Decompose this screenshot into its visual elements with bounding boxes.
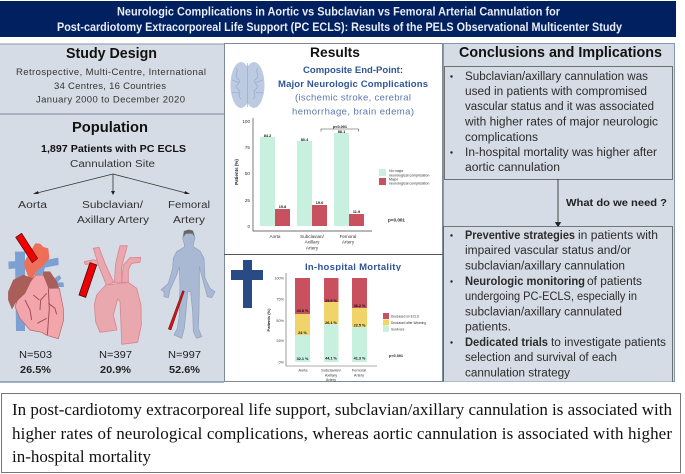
icon: cross [231, 260, 263, 308]
stacked bar chart: in-hospital mortality: Aorta [298, 368, 308, 372]
title banner: Post-cardiotomy Extracorporeal Life Support (PC ECLS): Results of the PELS Observational Multicenter Study [57, 22, 623, 34]
patient count: 1,897 Patients with PC ECLS [41, 144, 186, 155]
conclusions heading: Conclusions and Implications [459, 44, 662, 61]
needs box: of patients [587, 276, 642, 288]
stacked bar chart: in-hospital mortality: p<0.001 [389, 354, 403, 358]
bar chart: major neurologic complications: 25 [245, 198, 250, 203]
needs box: patients. [465, 322, 511, 334]
bottom summary box [2, 394, 680, 472]
conclusions box: used in patients with compromised [465, 86, 647, 98]
stacked bar chart: in-hospital mortality: 0% [278, 360, 285, 364]
bottom summary box: in-hospital mortality [12, 447, 152, 466]
bar chart: major neurologic complications: 15.8 [279, 205, 286, 209]
stacked bar chart: in-hospital mortality: Subclavian/ [321, 368, 342, 372]
site labels: Subclavian/ [82, 200, 143, 211]
site counts and percentages: 52.6% [169, 365, 200, 376]
bar chart: major neurologic complications: 0 [247, 224, 250, 229]
stacked bar chart: in-hospital mortality: Deceased after Weaning [391, 321, 426, 325]
site labels: Femoral [168, 200, 210, 211]
population heading: Population [72, 120, 148, 136]
stacked bar chart: in-hospital mortality: 36.2 % [354, 304, 366, 308]
results heading: Results [310, 45, 360, 60]
stacked bar chart: in-hospital mortality: 22.5 % [354, 324, 366, 328]
site labels: Axillary Artery [77, 215, 149, 226]
icon: aortic arch with axillary cannula [79, 246, 141, 344]
site labels: Aorta [18, 200, 48, 211]
bar chart: major neurologic complications: 88.1 [338, 130, 345, 134]
bar chart: major neurologic complications: 75 [245, 145, 250, 150]
panel: results [224, 44, 443, 382]
bar chart: major neurologic complications: Subclavian/ [300, 234, 325, 239]
panel: study design [0, 44, 224, 114]
bar chart: major neurologic complications [234, 118, 429, 250]
needs box: to investigate patients [551, 337, 666, 349]
site counts and percentages: N=503 [19, 350, 52, 361]
title banner: Neurologic Complications in Aortic vs Subclavian vs Femoral Arterial Cannulation for [117, 6, 560, 18]
bottom summary box: In post-cardiotomy extracorporeal life support, subclavian/axillary cannulation is associated with [12, 400, 672, 419]
needs box: Dedicated trials [465, 337, 548, 349]
needs box: undergoing PC-ECLS, especially in [465, 291, 637, 303]
conclusions box: vascular status and it was associated [465, 101, 654, 113]
panel: population [0, 114, 224, 382]
bar chart: major neurologic complications: neurological complication [389, 182, 429, 186]
bar chart: major neurologic complications: Femoral [340, 234, 356, 239]
stacked bar chart: in-hospital mortality [266, 271, 435, 382]
bar chart: major neurologic complications: 80.4 [301, 138, 309, 142]
site counts and percentages: N=397 [99, 350, 132, 361]
needs box: Neurologic monitoring [465, 276, 585, 288]
composite end-point heading: (ischemic stroke, cerebral [295, 92, 411, 104]
bar chart: major neurologic complications: 100 [242, 119, 250, 124]
stacked bar chart: in-hospital mortality: 50% [276, 319, 285, 323]
composite end-point heading: hemorrhage, brain edema) [292, 106, 414, 118]
needs box: subclavian/axillary cannulation [465, 260, 625, 272]
site counts and percentages: 20.9% [100, 365, 131, 376]
bar chart: major neurologic complications: neurological complication [389, 174, 429, 178]
stacked bar chart: in-hospital mortality: 41.3 % [354, 356, 366, 360]
panel: conclusions and implications [444, 44, 674, 382]
stacked bar chart: in-hospital mortality: Artery [326, 378, 336, 382]
stacked bar chart: in-hospital mortality: 24 % [298, 331, 307, 335]
title banner [0, 1, 676, 37]
bar chart: major neurologic complications: 50 [245, 171, 250, 176]
panel: study design: 34 Centres, 16 Countries [54, 81, 166, 92]
bar chart: major neurologic complications: 19.6 [316, 201, 323, 205]
site counts and percentages: 26.5% [20, 365, 51, 376]
icon: heart with aortic cannula [8, 233, 64, 339]
needs box: subclavian/axillary cannulated [465, 306, 622, 318]
stacked bar chart: in-hospital mortality: Axillary [325, 374, 337, 378]
conclusions box: In-hospital mortality was higher after [465, 147, 657, 159]
site labels [18, 200, 210, 226]
stacked bar chart: in-hospital mortality: Artery [354, 374, 364, 378]
bar chart: major neurologic complications: 11.9 [353, 210, 360, 214]
conclusions box: Subclavian/axillary cannulation was [465, 71, 648, 83]
composite end-point heading: Composite End-Point: [303, 65, 403, 76]
stacked bar chart: in-hospital mortality: Patients (%) [266, 308, 271, 331]
stacked bar chart: in-hospital mortality: 25% [276, 339, 285, 343]
stacked bar chart: in-hospital mortality: 75% [276, 298, 285, 302]
bar chart: major neurologic complications: Major [389, 178, 399, 182]
bar chart: major neurologic complications: No major [389, 169, 404, 173]
bar chart: major neurologic complications: Aorta [270, 234, 281, 239]
bottom summary box: higher rates of neurological complications, whereas aortic cannulation is associated with higher [12, 424, 672, 443]
arrow: conclusions to needs [556, 179, 560, 226]
stacked bar chart: in-hospital mortality: Deceased on ECLS [391, 314, 419, 318]
stacked bar chart: in-hospital mortality: 43.8 % [297, 309, 309, 313]
bar chart: major neurologic complications: p<0.001 [388, 218, 405, 222]
stacked bar chart: in-hospital mortality: 32.1 % [297, 357, 309, 361]
conclusions box: aortic cannulation [465, 162, 560, 174]
stacked bar chart: in-hospital mortality: 100% [274, 276, 285, 280]
needs box: in patients with [578, 230, 658, 242]
site counts and percentages [19, 350, 201, 376]
composite end-point heading [278, 65, 428, 118]
icon: human body with femoral cannula [161, 230, 215, 338]
bar chart: major neurologic complications: Artery [306, 246, 319, 250]
bar chart: major neurologic complications: Artery [342, 240, 355, 244]
bar chart: major neurologic complications: Axillary [305, 240, 320, 244]
composite end-point heading: Major Neurologic Complications [278, 79, 428, 90]
stacked bar chart: in-hospital mortality: 26.1 % [325, 321, 338, 325]
needs box: impaired vascular status and/or [465, 245, 631, 257]
needs box: cannulation strategy [465, 368, 570, 380]
stacked bar chart: in-hospital mortality: 29.9 % [325, 299, 338, 303]
icon: brain [230, 62, 264, 108]
stacked bar chart: in-hospital mortality: Femoral [352, 368, 366, 372]
arrows: cannulation site branches [33, 174, 190, 195]
site counts and percentages: N=997 [168, 350, 201, 361]
bar chart: major neurologic complications: Patients (%) [234, 159, 239, 185]
stacked bar chart: in-hospital mortality: 44.1 % [325, 356, 338, 360]
what do we need label: What do we need ? [566, 197, 667, 209]
conclusions box: with higher rates of major neurologic [464, 116, 658, 128]
in-hospital mortality heading: In-hospital Mortality [305, 262, 402, 273]
needs box: selection and survival of each [465, 352, 617, 364]
site labels: Artery [173, 215, 205, 226]
needs box: Preventive strategies [465, 230, 575, 242]
panel: study design: January 2000 to December 2020 [36, 94, 185, 106]
cannulation site label: Cannulation Site [70, 159, 155, 170]
bar chart: major neurologic complications: p<0.001 [333, 125, 347, 129]
conclusions box: complications [465, 132, 538, 144]
needs box [444, 226, 672, 382]
panel: study design: Study Design [66, 45, 157, 62]
conclusions box [444, 66, 672, 180]
panel: study design: Retrospective, Multi-Centre, International [16, 67, 206, 78]
bar chart: major neurologic complications: 84.2 [264, 134, 271, 138]
stacked bar chart: in-hospital mortality: Survivors [391, 328, 405, 332]
